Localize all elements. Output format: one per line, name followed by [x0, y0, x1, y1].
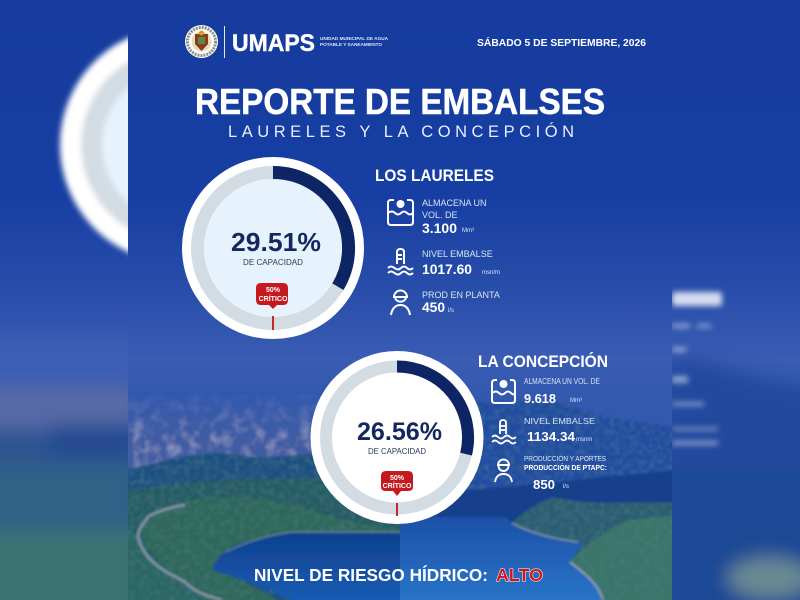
logo tagline: POTABLE Y SANEAMIENTO: [320, 42, 382, 48]
header: [185, 25, 646, 58]
volume label: Mm³: [462, 228, 474, 234]
logo wordmark: UMAPS: [232, 30, 315, 57]
critical marker: CRÍTICO: [383, 481, 412, 490]
volume label: Mm³: [570, 398, 582, 404]
progress arc 29.51%: [273, 172, 349, 287]
panel: La Concepción data: [478, 352, 608, 492]
production label: PROD EN PLANTA: [422, 290, 500, 300]
risk value: ALTO: [496, 565, 543, 585]
level label: NIVEL EMBALSE: [524, 416, 595, 426]
level label: NIVEL EMBALSE: [422, 249, 493, 259]
volume label: ALMACENA UN VOL. DE: [524, 377, 600, 386]
logo emblem: [185, 25, 218, 58]
critical marker: [381, 471, 413, 516]
critical marker: CRÍTICO: [259, 294, 288, 303]
blurred right side panel: [660, 292, 800, 600]
hill right: [513, 496, 672, 557]
production label: [422, 290, 500, 315]
production label: 850: [533, 477, 555, 492]
level label: msn/m: [482, 270, 500, 276]
level label: [524, 416, 595, 444]
value: 29.51%: [231, 227, 321, 257]
panel: gauge Los Laureles: [182, 157, 364, 339]
logo divider: [224, 26, 225, 58]
progress arc 26.56%: [397, 366, 468, 454]
footer: water risk level: [254, 564, 543, 585]
level label: 1017.60: [422, 261, 472, 277]
road: [138, 505, 222, 600]
caption: DE CAPACIDAD: [243, 257, 303, 267]
production label: l/s: [448, 308, 454, 314]
critical marker: [256, 283, 288, 330]
volume label: [422, 198, 487, 236]
level label: 1134.34: [527, 429, 576, 444]
landscape photo: left half: [120, 388, 410, 600]
icon: water level: [388, 249, 413, 274]
production label: [524, 454, 607, 492]
risk label: NIVEL DE RIESGO HÍDRICO:: [254, 564, 488, 585]
title: REPORTE DE EMBALSES: [195, 81, 605, 122]
level label: [422, 249, 500, 277]
logo tagline: [320, 36, 389, 48]
date: SÁBADO 5 DE SEPTIEMBRE, 2026: [477, 36, 646, 49]
heading: LOS LAURELES: [375, 166, 494, 185]
panel: gauge La Concepción: [310, 351, 484, 524]
subtitle: LAURELES Y LA CONCEPCIÓN: [228, 122, 574, 141]
blurred left side panel: [0, 33, 128, 600]
heading: LA CONCEPCIÓN: [478, 352, 608, 371]
critical marker: 50%: [266, 287, 281, 294]
volume label: ALMACENA UN: [422, 198, 487, 208]
production label: PRODUCCIÓN DE PTAPC:: [524, 463, 607, 472]
level label: msnm: [576, 437, 592, 443]
icon: water level: [492, 420, 516, 444]
critical marker: 50%: [390, 475, 405, 482]
volume label: 3.100: [422, 220, 457, 236]
volume label: VOL. DE: [422, 210, 458, 220]
icon: reservoir: [388, 200, 413, 225]
volume label: 9.618: [524, 391, 556, 406]
value: 26.56%: [357, 418, 442, 446]
icon: worker: [391, 291, 410, 315]
volume label: [524, 377, 600, 406]
landscape photo: right half: [390, 400, 680, 600]
icon: worker: [495, 460, 512, 482]
production label: 450: [422, 299, 445, 315]
production label: PRODUCCIÓN Y APORTES: [524, 454, 606, 463]
production label: l/s: [563, 484, 569, 490]
logo tagline: UNIDAD MUNICIPAL DE AGUA: [320, 36, 389, 42]
lake right: [390, 517, 603, 600]
panel: Los Laureles data: [375, 166, 500, 315]
caption: DE CAPACIDAD: [368, 446, 426, 456]
icon: reservoir: [492, 380, 515, 403]
lake left: [213, 533, 410, 600]
